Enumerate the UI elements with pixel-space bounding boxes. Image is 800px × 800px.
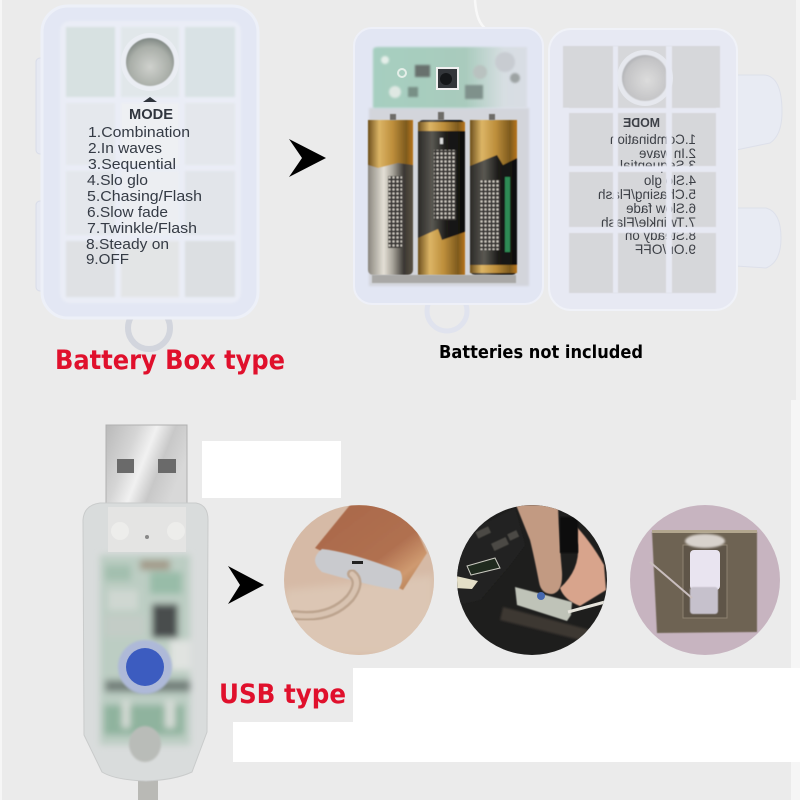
USB metal connector <box>106 425 187 507</box>
battery contacts <box>372 112 516 283</box>
mode list: 9.OFF <box>86 251 129 268</box>
blue button <box>537 592 545 600</box>
box compartments <box>66 27 235 297</box>
mirrored mode text: 6.Slow fade <box>626 200 696 216</box>
mirrored mode text <box>598 115 696 257</box>
lid tabs <box>736 75 782 268</box>
wire <box>650 562 692 598</box>
sticker <box>467 558 500 575</box>
inner board <box>100 555 190 745</box>
label: USB type: USB type <box>219 679 346 710</box>
arrow: USB <box>228 566 264 604</box>
main chip <box>436 67 459 90</box>
lens <box>121 33 179 91</box>
power bank face <box>315 549 402 590</box>
photo: power bank <box>284 505 434 655</box>
clear cable <box>294 574 357 616</box>
mirrored mode text: 8.Steady on <box>625 227 696 243</box>
mode arrow <box>143 97 157 102</box>
solder ring <box>398 69 406 77</box>
batteries <box>368 120 517 275</box>
base hanging loop <box>427 291 467 331</box>
interior <box>369 108 529 286</box>
lid lens <box>617 50 673 106</box>
usb slot <box>352 561 363 564</box>
USB dongle in plug <box>690 587 718 614</box>
dark gap <box>560 517 578 553</box>
keyboard keys <box>457 523 484 604</box>
clear dongle <box>515 587 572 621</box>
wire <box>475 0 487 30</box>
mirrored mode text: 2.In wave <box>639 145 696 161</box>
panel: USB dongle <box>83 425 208 800</box>
panel: open battery box lid <box>549 29 782 310</box>
circuit board <box>373 47 527 108</box>
cable stub <box>138 776 158 800</box>
copper power bank <box>315 505 427 590</box>
mirrored mode text: 4.Slo glo <box>644 172 696 188</box>
mirrored mode text: 5.Chasing/Flash <box>598 186 696 202</box>
lid compartments <box>563 46 720 293</box>
mirrored mode text: 1.Combination <box>610 131 696 147</box>
box side tabs <box>36 58 48 291</box>
mode heading: MODE <box>129 107 173 123</box>
mode list: 3.Sequential <box>88 156 176 173</box>
bottom lens <box>129 726 161 762</box>
cable <box>568 602 605 612</box>
neck hole <box>145 535 149 539</box>
mirrored mode text: 3.Sequential <box>620 157 696 173</box>
mode list: 4.Slo glo <box>87 172 148 189</box>
dark desk strip <box>500 607 590 640</box>
inner lattice <box>60 21 241 303</box>
lid ribs over text <box>563 46 720 293</box>
photo: laptop keyboard <box>456 505 607 655</box>
blue button <box>126 648 164 686</box>
panel: closed battery box <box>36 6 258 349</box>
mode list <box>86 124 202 268</box>
mode list: 8.Steady on <box>86 236 169 253</box>
button halo <box>118 640 172 694</box>
white plug <box>690 550 720 590</box>
arrow: battery box <box>289 139 326 177</box>
mirrored mode text: 9.On/OFF <box>635 241 696 257</box>
mode list: 6.Slow fade <box>87 204 168 221</box>
box body <box>42 6 258 318</box>
battery one <box>368 120 413 275</box>
base shell <box>354 28 543 304</box>
neck rivets <box>111 522 129 540</box>
panel: open battery box base <box>354 28 543 331</box>
battery two <box>418 120 465 275</box>
board blotches <box>381 52 520 99</box>
mode list: 7.Twinkle/Flash <box>87 220 197 237</box>
mirrored mode text: 7.Twinkle/Flash <box>601 214 696 230</box>
mode list: 1.Combination <box>88 124 190 141</box>
socket <box>683 545 727 618</box>
mode list: 5.Chasing/Flash <box>87 188 202 205</box>
wall plate <box>652 532 757 633</box>
white mask bottom <box>233 668 800 762</box>
lid shell <box>549 29 737 310</box>
mode list: 2.In waves <box>88 140 162 157</box>
hand <box>516 505 562 594</box>
label: battery box type: Battery Box type <box>55 345 285 376</box>
dongle body <box>83 503 208 781</box>
hanging loop <box>128 307 170 349</box>
caption: batteries not included: Batteries not included <box>439 342 643 363</box>
photo: wall socket <box>630 505 780 655</box>
glow <box>685 534 725 548</box>
battery three <box>470 120 517 275</box>
white mask top <box>202 441 341 498</box>
mirrored mode text: MODE <box>623 115 660 130</box>
metal neck <box>108 507 186 552</box>
